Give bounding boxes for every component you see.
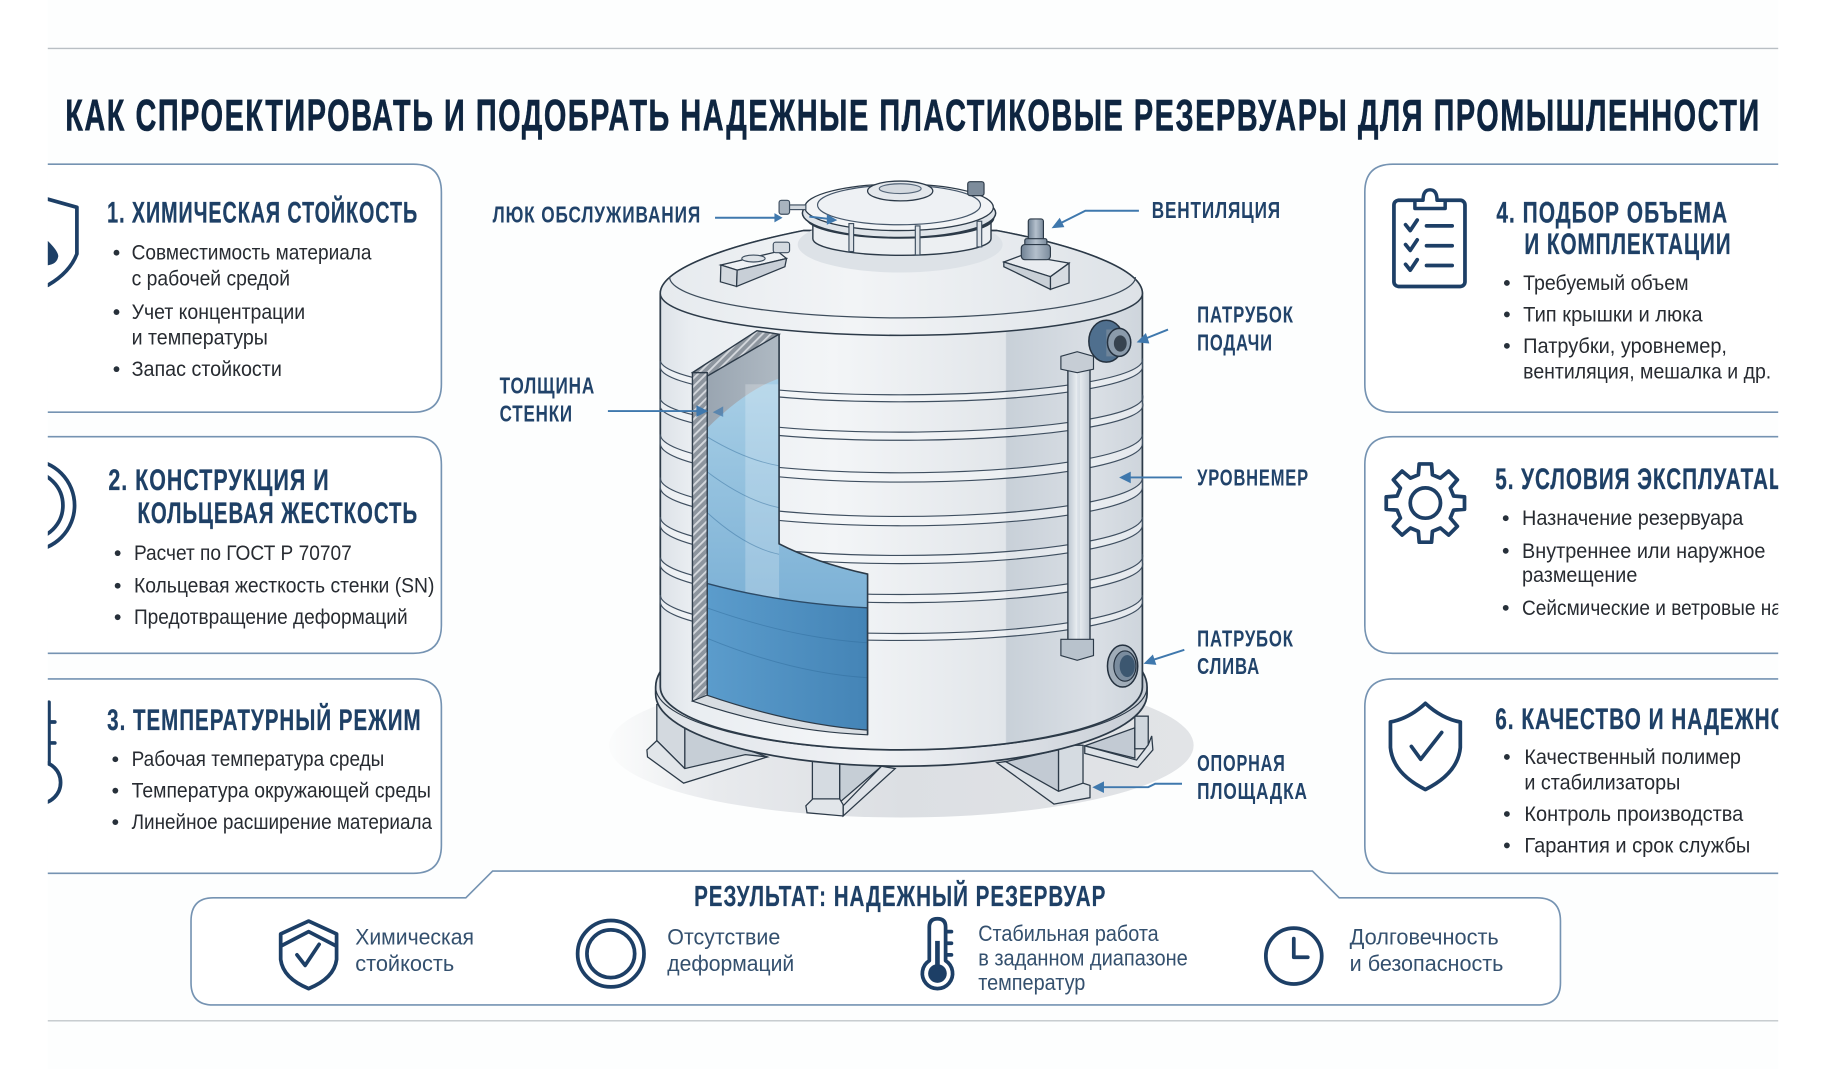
bullet list: Линейное расширение материала: [132, 811, 432, 834]
callout: wall thickness: [500, 373, 723, 427]
result text: no deformation: [667, 924, 794, 976]
bullet list: [1504, 272, 1771, 383]
bullet list: [1504, 746, 1750, 857]
bullet list: вентиляция, мешалка и др.: [1523, 360, 1771, 383]
panel: 2 structure and ring stiffness: [0, 437, 441, 653]
bullet list: и температуры: [132, 327, 268, 350]
callout: feed nozzle: ПОДАЧИ: [1197, 330, 1273, 356]
result text: chemical resistance: Химическая: [355, 924, 474, 949]
callout: feed nozzle: [1137, 302, 1294, 356]
bullet list: Запас стойкости: [132, 358, 282, 381]
icon: shield with drop: [48, 197, 79, 288]
callout: level gauge: [1119, 465, 1309, 491]
callout: support pad: ОПОРНАЯ: [1197, 750, 1286, 776]
bullet list: Кольцевая жесткость стенки (SN): [134, 575, 434, 598]
bullet list: Расчет по ГОСТ Р 70707: [134, 542, 352, 565]
result text: stable operation: Стабильная работа: [978, 921, 1159, 946]
panel: 6 quality and reliability: [1365, 679, 1826, 873]
bullet list: Патрубки, уровнемер,: [1523, 335, 1727, 358]
result text: no deformation: Отсутствие: [667, 924, 780, 949]
bullet list: Гарантия и срок службы: [1524, 834, 1750, 857]
callout: drain nozzle: [1144, 625, 1294, 679]
callout: wall thickness: СТЕНКИ: [500, 401, 573, 427]
heading: temperature: 3. ТЕМПЕРАТУРНЫЙ РЕЖИМ: [107, 703, 422, 737]
result icon: thermometer: [922, 919, 953, 989]
result text: stable operation: [978, 921, 1188, 995]
roof pad left: [720, 242, 790, 286]
result text: stable operation: температур: [978, 970, 1085, 995]
panel: 4 volume and equipment: [1365, 164, 1817, 412]
result icon: clock: [1266, 928, 1322, 984]
callout: ventilation: [1052, 197, 1281, 228]
bullet list: Качественный полимер: [1524, 746, 1741, 769]
bullet list: Внутреннее или наружное: [1522, 540, 1765, 563]
cutaway with water: [692, 326, 873, 745]
bullet list: [112, 748, 432, 834]
base ring: [656, 608, 1147, 766]
bullet list: Назначение резервуара: [1522, 507, 1744, 530]
bullet list: Требуемый объем: [1523, 272, 1689, 295]
bullet list: Рабочая температура среды: [132, 748, 384, 771]
result text: chemical resistance: стойкость: [355, 951, 454, 976]
icon: gear: [1386, 464, 1465, 542]
heading: structure: КОЛЬЦЕВАЯ ЖЕСТКОСТЬ: [137, 497, 418, 530]
result text: durability: [1350, 924, 1503, 976]
maintenance hatch: [779, 181, 1003, 272]
upper nozzle: [1089, 320, 1131, 362]
heading: structure: 2. КОНСТРУКЦИЯ И: [108, 464, 330, 497]
callout: drain nozzle: СЛИВА: [1197, 653, 1260, 679]
icon: clipboard: [1394, 190, 1465, 286]
level gauge: [1061, 352, 1093, 660]
bullet list: Совместимость материала: [132, 242, 372, 265]
tank body: [660, 231, 1142, 750]
result text: no deformation: деформаций: [667, 951, 794, 976]
heading: chemical resistance: 1. ХИМИЧЕСКАЯ СТОЙКОСТЬ: [107, 195, 418, 229]
bullet list: [1502, 510, 1778, 620]
heading: structure: [108, 464, 418, 530]
callout: ventilation: ВЕНТИЛЯЦИЯ: [1152, 197, 1281, 223]
panel: result: [191, 871, 1560, 1005]
lower nozzle: [1107, 645, 1138, 687]
bullet list: и стабилизаторы: [1524, 772, 1680, 795]
result text: durability: и безопасность: [1350, 951, 1503, 976]
heading: volume: 4. ПОДБОР ОБЪЕМА: [1496, 196, 1728, 229]
panel: 3 temperature mode: [19, 679, 441, 873]
tank illustration: [609, 181, 1194, 817]
tank roof: [660, 231, 1142, 335]
result icon: rings: [578, 921, 644, 987]
result text: durability: Долговечность: [1350, 924, 1499, 949]
rib bands: [660, 359, 1143, 640]
result text: chemical resistance: [355, 924, 474, 976]
callout: support pad: ПЛОЩАДКА: [1197, 778, 1308, 804]
bullet list: с рабочей средой: [132, 267, 290, 290]
result heading: РЕЗУЛЬТАТ: НАДЕЖНЫЙ РЕЗЕРВУАР: [694, 879, 1106, 913]
bullet list: Контроль производства: [1524, 803, 1744, 826]
bullet list: Учет концентрации: [132, 301, 305, 324]
bullet list: Предотвращение деформаций: [134, 606, 408, 629]
icon: rings: [48, 462, 76, 549]
callout: maintenance hatch: ЛЮК ОБСЛУЖИВАНИЯ: [493, 201, 701, 227]
heading: volume: И КОМПЛЕКТАЦИИ: [1524, 228, 1732, 261]
roof pad with vent: [1004, 219, 1069, 289]
heading: volume: [1496, 196, 1732, 261]
callout: drain nozzle: ПАТРУБОК: [1197, 625, 1294, 651]
bullet list: [114, 242, 372, 381]
icon: thermometer: [48, 700, 62, 804]
result icon: shield: [281, 921, 337, 989]
bullet list: [115, 542, 434, 629]
callout: level gauge: УРОВНЕМЕР: [1197, 465, 1309, 491]
panel: 5 operating conditions: [1365, 437, 1826, 653]
support feet: [647, 705, 1153, 816]
callout: feed nozzle: ПАТРУБОК: [1197, 302, 1294, 328]
bullet list: размещение: [1522, 564, 1637, 587]
callout: support pad: [1092, 750, 1308, 804]
panel: 1 chemical resistance: [23, 164, 441, 412]
result text: stable operation: в заданном диапазоне: [978, 945, 1188, 970]
icon: shield check: [1390, 703, 1460, 790]
bullet list: Тип крышки и люка: [1523, 303, 1703, 326]
callout: wall thickness: ТОЛЩИНА: [500, 373, 595, 399]
bullet list: Температура окружающей среды: [132, 780, 431, 803]
